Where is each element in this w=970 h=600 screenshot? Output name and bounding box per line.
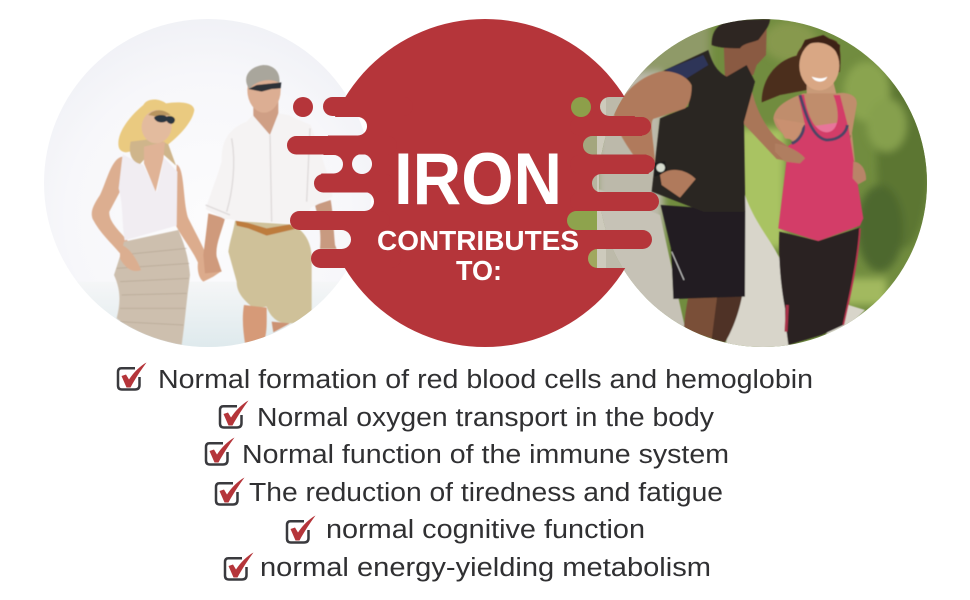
item 2 [220, 400, 714, 432]
left red dot [293, 97, 313, 117]
item 3 [206, 438, 729, 469]
left red pills [287, 97, 413, 268]
text: The reduction of tiredness and fatigue [249, 479, 723, 507]
text: Normal function of the immune system [242, 441, 729, 469]
heading: contributes: CONTRIBUTES [377, 225, 579, 256]
item 1 [118, 362, 813, 394]
icon: checkbox [118, 362, 146, 390]
item 6 [225, 552, 711, 582]
icon: checkbox [216, 478, 244, 504]
red centre circle with slotted edges [287, 19, 659, 347]
text: normal energy-yielding metabolism [260, 554, 711, 582]
text: normal cognitive function [326, 516, 645, 544]
checklist [118, 362, 813, 582]
photo: young couple running outdoors [597, 15, 933, 352]
icon: checkbox [287, 516, 316, 542]
right red pills [570, 117, 659, 249]
icon: checkbox [225, 552, 254, 580]
item 4 [216, 478, 723, 507]
icon: checkbox [220, 400, 248, 428]
heading: IRON: IRON [394, 139, 562, 220]
red disc [321, 19, 649, 347]
photo: senior couple walking on beach [40, 15, 377, 352]
text: Normal oxygen transport in the body [257, 404, 714, 432]
item 5 [287, 516, 645, 544]
heading: to: TO: [456, 255, 502, 286]
text: Normal formation of red blood cells and hemoglobin [158, 366, 813, 394]
icon: checkbox [206, 438, 234, 464]
photo strip showing through the right-hand cutouts [567, 90, 624, 275]
